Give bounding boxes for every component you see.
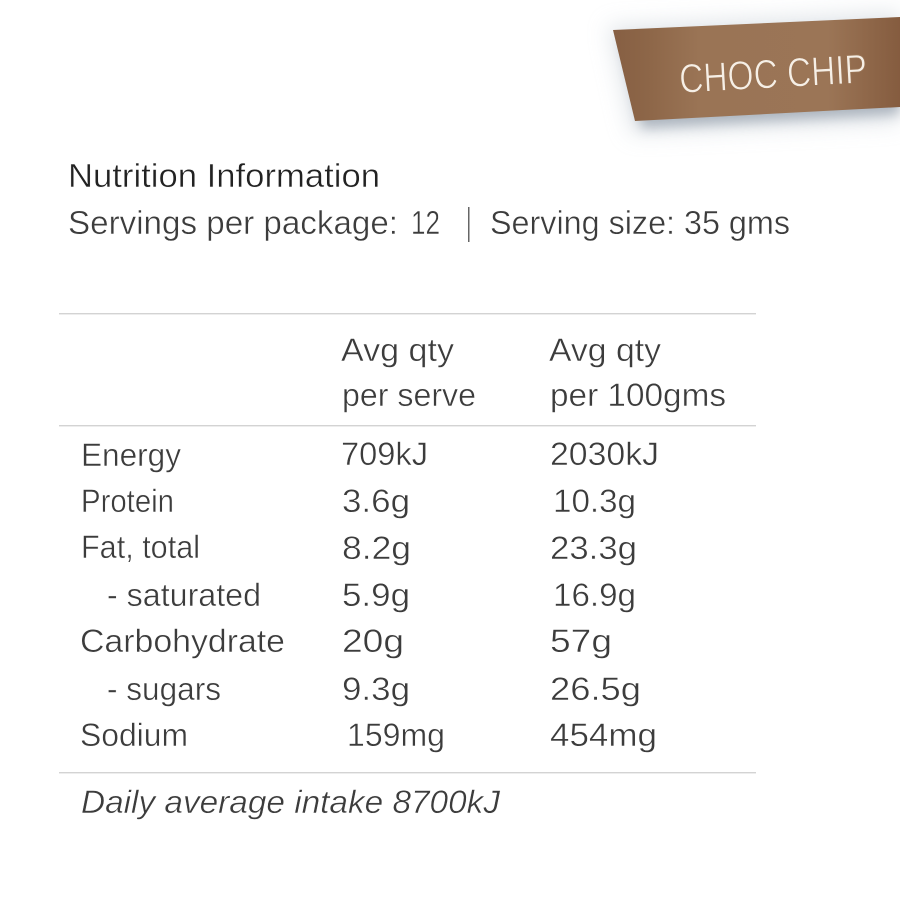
column header: per serve: per serve <box>342 377 476 413</box>
values: per serve: 8.2g <box>342 530 411 566</box>
values: per 100gms: 23.3g <box>550 530 637 566</box>
row labels: - sugars <box>107 671 221 707</box>
serving details: Serving size: 35 gms <box>490 204 790 241</box>
values: per 100gms: 10.3g <box>553 483 636 519</box>
values: per 100gms: 26.5g <box>550 671 641 707</box>
values: per 100gms: 16.9g <box>553 577 636 613</box>
values: per serve: 20g <box>342 623 404 659</box>
footnote: daily intake: Daily average intake 8700kJ <box>81 784 501 820</box>
column header: per 100gms: Avg qty <box>549 332 661 368</box>
values: per serve: 5.9g <box>342 577 410 613</box>
values: per serve: 159mg <box>347 717 445 753</box>
ribbon: choc chip <box>608 12 900 134</box>
row labels: Sodium <box>80 717 188 753</box>
row labels: - saturated <box>107 577 261 613</box>
values: per 100gms: 57g <box>550 623 612 659</box>
row labels: Energy <box>81 437 181 473</box>
nutrition table <box>59 313 756 773</box>
column header: per serve <box>341 332 476 413</box>
serving details: Servings per package: <box>68 204 398 241</box>
column header: per 100gms <box>549 332 726 413</box>
column header: per 100gms: per 100gms <box>550 377 726 413</box>
heading: nutrition information: Nutrition Information <box>68 157 380 194</box>
serving details: 12 <box>411 204 440 241</box>
row labels <box>80 437 285 753</box>
values: per 100gms: 454mg <box>550 717 657 753</box>
column header: per serve: Avg qty <box>341 332 454 368</box>
row labels: Protein <box>81 483 174 519</box>
values: per serve: 9.3g <box>342 671 410 707</box>
values: per serve: 709kJ <box>341 436 428 472</box>
values: per serve <box>341 436 445 753</box>
values: per 100gms: 2030kJ <box>550 436 659 472</box>
values: per serve: 3.6g <box>342 483 410 519</box>
values: per 100gms <box>550 436 659 753</box>
row labels: Carbohydrate <box>80 623 285 659</box>
row labels: Fat, total <box>81 529 200 565</box>
serving details <box>68 204 790 242</box>
